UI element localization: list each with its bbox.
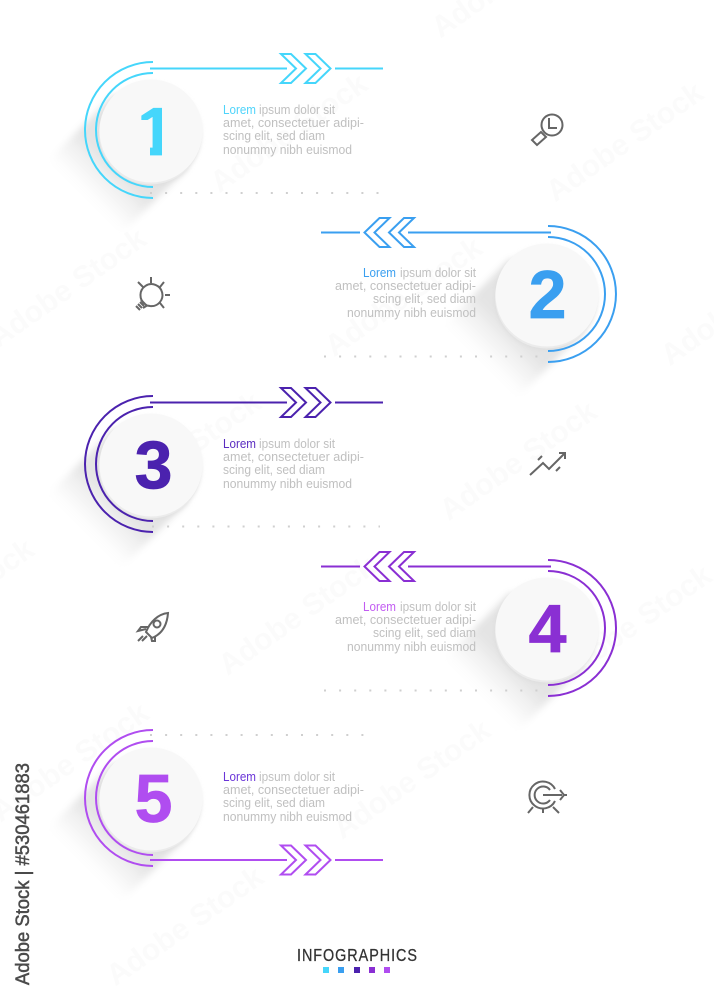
circle badge 5 <box>44 748 202 906</box>
text block 3: ipsum dolor sit <box>259 437 335 451</box>
icon: target with arrow <box>528 782 567 813</box>
side credit text: Adobe Stock | #530461883 <box>12 763 34 985</box>
circle badge 4 <box>440 578 598 736</box>
dotted line 3 <box>152 526 380 528</box>
text block 3: amet, consectetuer adipi- <box>223 450 364 464</box>
arcs 5 <box>85 730 153 866</box>
text: Adobe Stock <box>204 67 374 199</box>
dotted line 5 <box>150 734 376 736</box>
number 5: 5 <box>135 761 172 837</box>
arcs 3 <box>85 396 153 532</box>
text block 2: amet, consectetuer adipi- <box>335 279 476 293</box>
text block 3: scing elit, sed diam <box>223 463 325 477</box>
arrow 5 <box>150 846 383 874</box>
text: Adobe Stock <box>327 713 497 846</box>
text: Adobe Stock <box>549 558 714 691</box>
arrow 2 <box>321 218 551 247</box>
text block 2: Lorem <box>363 266 396 280</box>
text block 4: amet, consectetuer adipi- <box>335 613 476 627</box>
text: Adobe Stock <box>213 549 382 682</box>
panel: step 5 <box>44 730 383 906</box>
text: Adobe Stock <box>434 395 603 527</box>
text block 1 <box>223 103 364 157</box>
title: INFOGRAPHICS <box>297 946 417 965</box>
number 4: 4 <box>529 591 567 667</box>
text block 4 <box>335 600 476 654</box>
panel: step 1 <box>64 53 383 218</box>
dotted line 1 <box>150 192 380 194</box>
text block 2 <box>335 266 476 320</box>
legend colour squares <box>323 967 390 973</box>
number 2: 2 <box>529 257 566 333</box>
icon: rocket <box>138 613 168 641</box>
text: Adobe Stock <box>319 231 489 363</box>
arrow 4 <box>321 552 551 581</box>
arrow 1 <box>150 54 383 83</box>
text block 2: ipsum dolor sit <box>400 266 476 280</box>
number 1: 1 <box>137 94 175 170</box>
dotted line 4 <box>324 690 550 692</box>
text block 1: Lorem <box>223 103 256 117</box>
text block 5: amet, consectetuer adipi- <box>223 783 364 797</box>
text: Adobe Stock <box>100 860 270 992</box>
text block 5 <box>223 770 364 824</box>
text block 3 <box>223 437 364 491</box>
circle badge 1 <box>44 80 202 238</box>
icon: growth trend arrow <box>530 453 565 475</box>
text block 5: ipsum dolor sit <box>259 770 335 784</box>
text block 1: scing elit, sed diam <box>223 129 325 143</box>
text block 5: scing elit, sed diam <box>223 796 325 810</box>
text block 4: Lorem <box>363 600 396 614</box>
arcs 2 <box>548 226 616 362</box>
text block 4: scing elit, sed diam <box>373 626 476 640</box>
text block 4: nonummy nibh euismod <box>347 640 476 654</box>
panel: step 4 <box>321 552 616 736</box>
text block 1: amet, consectetuer adipi- <box>223 116 364 130</box>
text: Adobe Stock <box>98 386 267 518</box>
dotted line 2 <box>324 356 550 358</box>
arcs 4 <box>548 560 616 696</box>
text block 5: nonummy nibh euismod <box>223 810 352 824</box>
text block 3: Lorem <box>223 437 256 451</box>
icon: light bulb <box>136 277 170 310</box>
icon: magnifier with clock <box>532 114 562 145</box>
text block 3: nonummy nibh euismod <box>223 477 352 491</box>
text block 4: ipsum dolor sit <box>400 600 476 614</box>
number 3: 3 <box>135 427 172 503</box>
text block 2: scing elit, sed diam <box>373 292 476 306</box>
text block 2: nonummy nibh euismod <box>347 306 476 320</box>
text block 1: nonummy nibh euismod <box>223 143 352 157</box>
text block 1: ipsum dolor sit <box>259 103 335 117</box>
text: Adobe Stock <box>540 76 710 208</box>
panel: step 3 <box>44 388 383 572</box>
arrow 3 <box>150 388 383 417</box>
circle badge 3 <box>44 414 202 572</box>
panel: step 2 <box>321 218 616 402</box>
text block 5: Lorem <box>223 770 256 784</box>
circle badge 2 <box>440 244 598 402</box>
arcs 1 <box>85 62 153 198</box>
